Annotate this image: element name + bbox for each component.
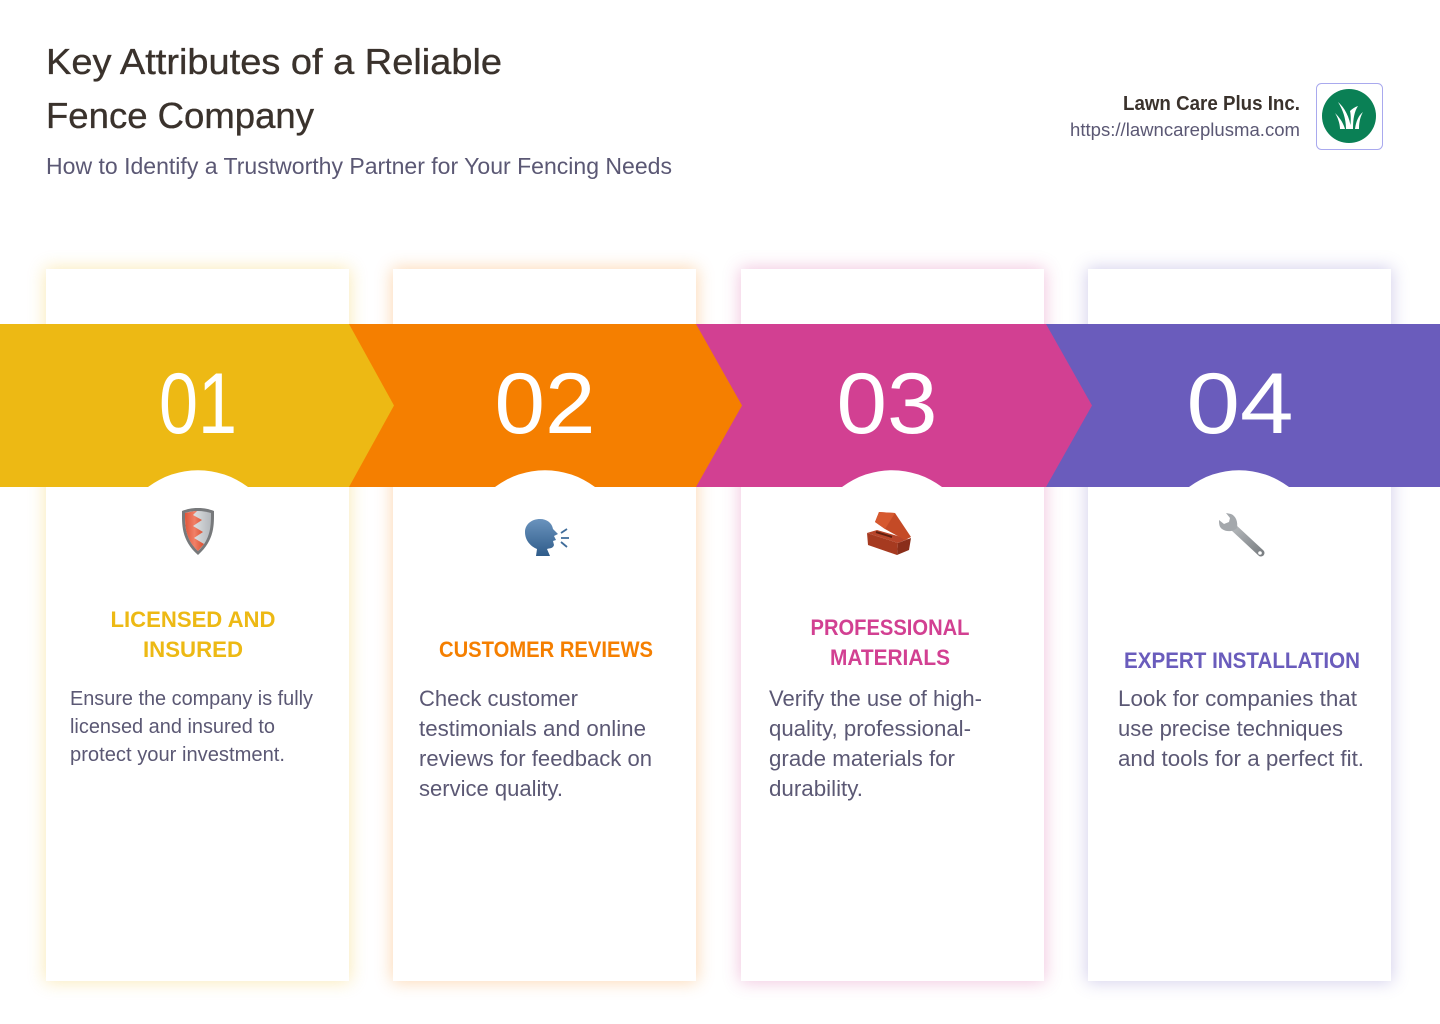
header subtitle: How to Identify a Trustworthy Partner for Your Fencing Needs <box>46 153 672 179</box>
text: professional materials description: quality, professional- <box>769 716 971 741</box>
number 04: 04 <box>1186 356 1294 452</box>
heading: licensed and insured <box>110 607 276 662</box>
text: professional materials description: durability. <box>769 776 863 801</box>
text: customer reviews description: Check customer <box>419 686 578 711</box>
text: expert installation description: use precise techniques <box>1118 716 1343 741</box>
text: customer reviews description: reviews for feedback on <box>419 746 652 771</box>
panel: card 4 background <box>1088 269 1391 981</box>
icon: brick <box>867 512 911 555</box>
number 02: 02 <box>494 356 596 452</box>
heading: licensed and insured: INSURED <box>143 637 243 662</box>
heading: professional materials <box>810 615 970 670</box>
panel: card 2 background <box>393 269 696 981</box>
text: customer reviews description: testimonials and online <box>419 716 646 741</box>
arrow band: step 2 <box>349 324 742 487</box>
header title <box>46 41 502 136</box>
text: expert installation description <box>1118 686 1364 771</box>
text: licensed and insured description: licensed and insured to <box>70 716 275 738</box>
text: customer reviews description <box>419 686 652 801</box>
company name: Lawn Care Plus Inc. <box>1123 93 1300 115</box>
icon: shield <box>182 508 214 555</box>
arrow band: step 1 <box>0 324 394 487</box>
panel: card 1 background <box>46 269 349 981</box>
notch: step 1 <box>148 470 248 487</box>
heading: professional materials: MATERIALS <box>830 645 950 670</box>
notch: step 3 <box>842 470 942 487</box>
text: customer reviews description: service quality. <box>419 776 563 801</box>
text: licensed and insured description: protect your investment. <box>70 744 285 766</box>
panel: card 3 background <box>741 269 1044 981</box>
text: professional materials description: Verify the use of high- <box>769 686 982 711</box>
heading: customer reviews: CUSTOMER REVIEWS <box>439 637 653 662</box>
company url: https://lawncareplusma.com <box>1070 120 1300 140</box>
text: professional materials description: grade materials for <box>769 746 955 771</box>
text: professional materials description <box>769 686 982 801</box>
text: licensed and insured description <box>70 688 313 766</box>
notch: step 4 <box>1189 470 1289 487</box>
text: expert installation description: and tools for a perfect fit. <box>1118 746 1364 771</box>
header title: Fence Company <box>46 95 315 136</box>
logo <box>1316 84 1382 150</box>
text: expert installation description: Look for companies that <box>1118 686 1357 711</box>
text: licensed and insured description: Ensure the company is fully <box>70 688 313 710</box>
heading: professional materials: PROFESSIONAL <box>810 615 970 640</box>
heading: licensed and insured: LICENSED AND <box>110 607 276 632</box>
heading: expert installation: EXPERT INSTALLATION <box>1124 648 1360 673</box>
header title: Key Attributes of a Reliable <box>46 41 502 82</box>
arrow band: step 4 <box>1046 324 1440 487</box>
number 03: 03 <box>836 356 938 452</box>
icon: speaking head <box>525 519 569 556</box>
icon: wrench <box>1219 513 1262 555</box>
number 01: 01 <box>159 356 237 452</box>
notch: step 2 <box>495 470 595 487</box>
arrow band: step 3 <box>696 324 1092 487</box>
